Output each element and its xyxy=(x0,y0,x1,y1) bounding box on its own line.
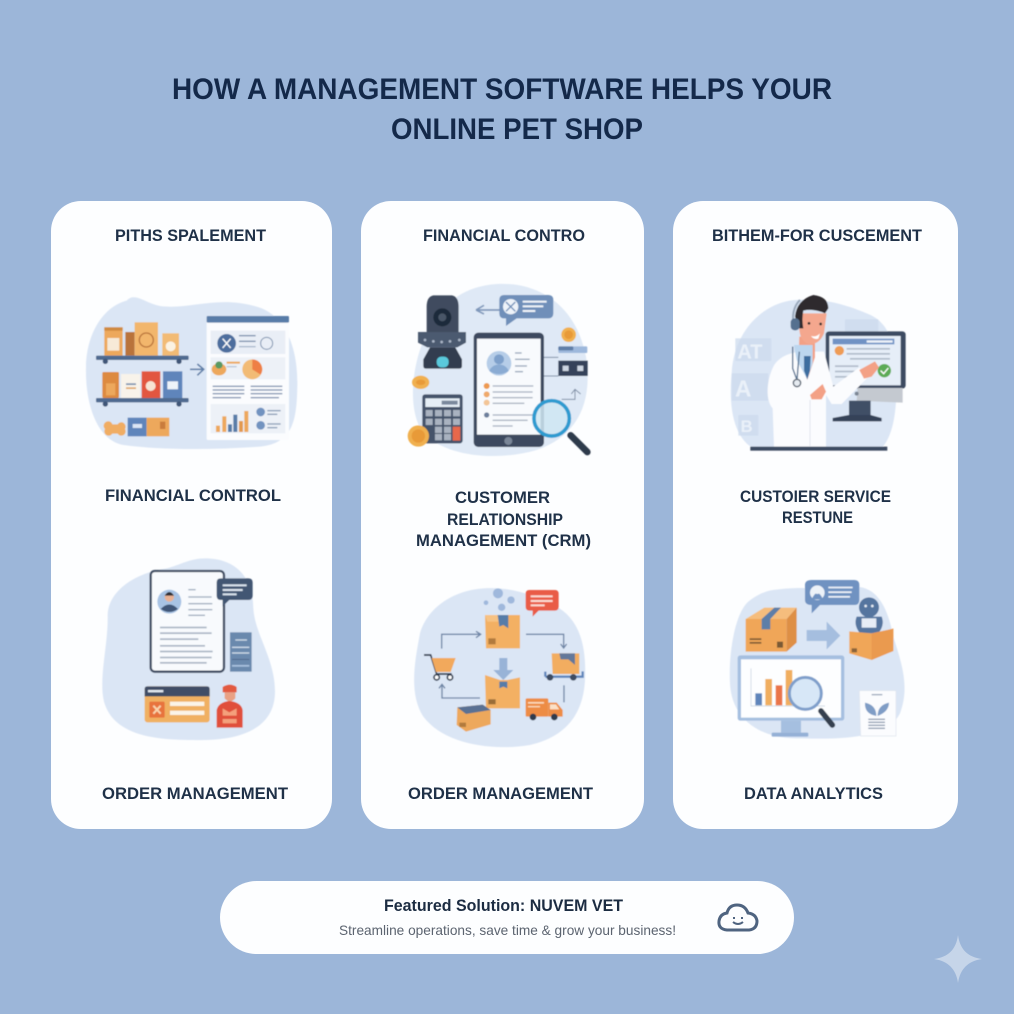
title: HOW A MANAGEMENT SOFTWARE HELPS YOUR xyxy=(172,73,832,106)
bubbles xyxy=(484,588,515,611)
desk line xyxy=(750,447,887,451)
faded letter tiles xyxy=(732,319,878,436)
down arrow xyxy=(493,658,513,680)
heading: customer relationship management: CUSTOMER xyxy=(455,488,550,507)
monitor xyxy=(826,331,906,421)
arrow xyxy=(190,364,204,375)
magnifier xyxy=(789,677,832,725)
heading: financial control: FINANCIAL CONTROL xyxy=(105,486,281,505)
icon: sparkle xyxy=(934,935,982,983)
illustration: customer profile xyxy=(102,558,275,740)
icon: cloud xyxy=(719,905,757,930)
heading: customer service restune xyxy=(740,487,891,527)
doctor xyxy=(768,295,879,447)
large box xyxy=(746,608,797,652)
monitor with chart xyxy=(738,655,844,737)
tablet xyxy=(474,333,544,447)
magnifier xyxy=(534,401,587,452)
blob background xyxy=(414,588,585,747)
delivery truck xyxy=(526,698,563,720)
heading: order management left: ORDER MANAGEMENT xyxy=(102,784,289,803)
heading: customer relationship management: MANAGEMENT (CRM) xyxy=(416,531,591,550)
illustration: veterinarian with monitor xyxy=(731,295,906,451)
robot in box xyxy=(849,597,893,660)
speech bubble xyxy=(805,580,859,613)
camera device xyxy=(418,295,466,369)
top box xyxy=(485,615,520,648)
heading: bithem-for cuscement: BITHEM-FOR CUSCEMENT xyxy=(712,226,923,245)
blob background xyxy=(731,299,897,450)
panel: middle card xyxy=(361,201,644,829)
order card xyxy=(145,686,210,722)
illustration: camera, calculator, tablet and magnifier xyxy=(408,284,588,456)
shopping cart xyxy=(424,655,456,680)
heading: customer relationship management xyxy=(416,488,591,550)
heading: customer service restune: RESTUNE xyxy=(782,508,853,527)
heading: financial contro: FINANCIAL CONTRO xyxy=(423,226,585,245)
report sheet xyxy=(859,691,896,736)
blob background xyxy=(102,558,275,740)
small ui cards xyxy=(544,346,588,399)
panel: featured solution banner xyxy=(220,881,794,954)
banner heading: Featured Solution: NUVEM VET xyxy=(384,896,624,915)
cart box with dolly xyxy=(545,653,583,681)
red message bubble xyxy=(526,590,559,617)
open box xyxy=(457,705,491,732)
side list xyxy=(230,632,252,672)
banner tagline: Streamline operations, save time & grow your business! xyxy=(339,922,676,938)
flow arrows xyxy=(439,631,567,702)
bone and boxes xyxy=(104,418,169,436)
blob background xyxy=(86,297,297,449)
profile document xyxy=(151,571,224,672)
faded letter tiles: A xyxy=(735,376,751,402)
center box xyxy=(485,675,520,708)
coins xyxy=(412,327,576,389)
calculator xyxy=(408,394,463,447)
speech bubble xyxy=(217,578,253,606)
blob background xyxy=(730,587,905,739)
dashboard window xyxy=(207,316,289,440)
title xyxy=(172,73,832,146)
speech bubble and arrow xyxy=(476,295,553,326)
heading: data analytics: DATA ANALYTICS xyxy=(744,784,883,803)
heading: customer service restune: CUSTOIER SERVICE xyxy=(740,487,891,506)
panel: right card xyxy=(673,201,958,829)
blob background xyxy=(413,284,588,456)
heading: customer relationship management: RELATIONSHIP xyxy=(447,510,563,529)
illustration: data analytics xyxy=(730,580,905,739)
heading: piths spalement: PITHS SPALEMENT xyxy=(115,226,267,245)
illustration: order flow xyxy=(414,588,585,747)
big arrow xyxy=(807,622,840,649)
heading: order management middle: ORDER MANAGEMENT xyxy=(408,784,594,803)
shelves with food bags xyxy=(96,322,189,407)
title: ONLINE PET SHOP xyxy=(391,113,643,146)
delivery person xyxy=(217,685,243,728)
panel: left card xyxy=(51,201,332,829)
faded letter tiles: AT xyxy=(737,341,762,363)
illustration: pet products shelves and dashboard xyxy=(86,297,297,449)
faded letter tiles: B xyxy=(741,417,753,436)
